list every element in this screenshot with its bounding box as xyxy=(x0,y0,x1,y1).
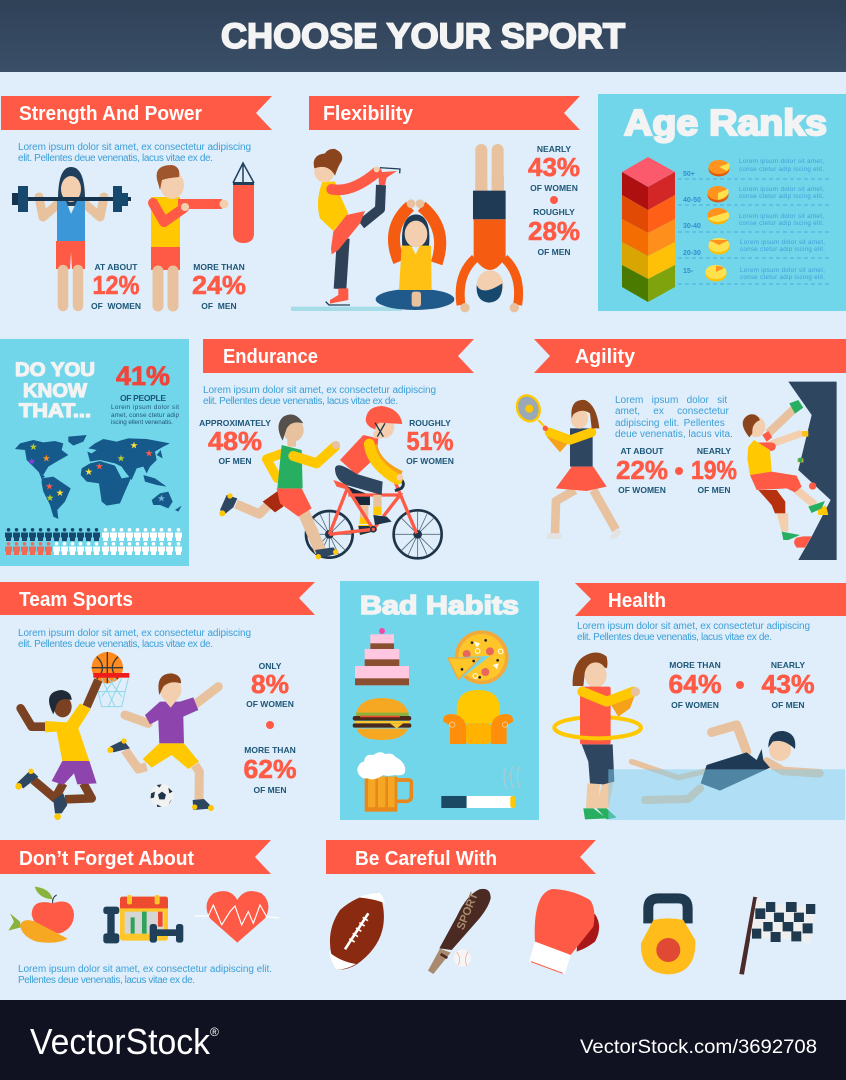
labels: age ranges: 20-30 xyxy=(683,250,701,257)
text: team sports description: elit. Pellentes deue venenatis, lacus vitae ex de. xyxy=(18,639,213,650)
panel: flexibility xyxy=(291,96,580,312)
chart: world map with stars: ★ xyxy=(84,467,93,477)
figure: basketball player jumping xyxy=(15,680,98,820)
heading: Do You Know That: THAT... xyxy=(19,400,91,422)
text: age rank descriptions: Lorem ipsum dolor sit amet, xyxy=(739,213,824,220)
text: team sports description: Lorem ipsum dolor sit amet, ex consectetur adipiscing xyxy=(18,628,251,639)
figure: woman lifting barbell xyxy=(12,167,131,306)
ribbon: Flexibility: Flexibility xyxy=(323,103,414,125)
stat: 62% of men xyxy=(244,745,296,795)
stat: 48% of men: OF MEN xyxy=(218,456,252,466)
pool water xyxy=(608,769,845,820)
panel: health xyxy=(554,583,846,820)
stat: 43% and 28%: 28% xyxy=(528,216,580,246)
figure: tennis player xyxy=(513,392,622,539)
panel: agility xyxy=(513,339,846,560)
stat: 43% of men xyxy=(762,660,814,710)
icon: armchair xyxy=(443,690,513,744)
stat: 24% of men: OF MEN xyxy=(201,301,237,311)
ribbon: Team Sports: Team Sports xyxy=(19,589,133,611)
stat: 22% of women xyxy=(616,446,668,495)
ice floor xyxy=(291,307,402,311)
text: endurance description: Lorem ipsum dolor sit amet, ex consectetur adipiscing xyxy=(203,385,436,396)
ribbon: Team Sports xyxy=(0,582,315,615)
figure: woman with hula hoop xyxy=(554,652,641,819)
chart: world map with stars xyxy=(15,435,182,519)
text: age rank descriptions: conse ctetur adip iscing elit. xyxy=(739,220,824,227)
figure: rock climber xyxy=(743,400,825,540)
stat: 43% and 28% xyxy=(528,144,580,257)
stat: 22% of women: 22% xyxy=(616,455,668,485)
panel: age ranks xyxy=(598,94,846,311)
text: don't forget description: Pellentes deue venenatis, lacus vitae ex de. xyxy=(18,975,195,986)
icon: pizza xyxy=(447,630,509,684)
header band with title: CHOOSE YOUR SPORT xyxy=(221,17,625,56)
stat: 24% of men: MORE THAN xyxy=(193,262,245,272)
ribbon: Agility xyxy=(534,339,846,373)
labels: age ranges: 40-50 xyxy=(683,197,701,204)
icon: american football xyxy=(329,892,385,970)
footer: watermark band xyxy=(0,1000,846,1080)
ribbon: Strength And Power: Strength And Power xyxy=(19,103,202,125)
figure: figure skater xyxy=(314,149,400,305)
stat: 41% of people: OF PEOPLE xyxy=(120,393,166,403)
icon: heart with pulse xyxy=(194,891,279,943)
stat: 24% of men xyxy=(192,262,246,311)
icon: calendar and dumbbells xyxy=(103,895,183,943)
heading: Do You Know That: KNOW xyxy=(23,380,88,402)
text: team sports description xyxy=(18,628,251,650)
text: agility description: Lorem ipsum dolor sit xyxy=(615,395,727,406)
figure: man punching xyxy=(151,165,228,306)
stat: 19% of men: NEARLY xyxy=(697,446,731,456)
ribbon: Be Careful With xyxy=(326,840,596,874)
stat: 43% of men: NEARLY xyxy=(771,660,805,670)
age rows xyxy=(678,179,830,284)
stat: 51% of women: 51% xyxy=(406,426,454,456)
text: age rank descriptions: Lorem ipsum dolor sit amet, xyxy=(739,158,824,165)
stat: 62% of men: OF MEN xyxy=(253,785,287,795)
figure: meditating woman xyxy=(376,199,454,310)
text: health description: elit. Pellentes deue venenatis, lacus vitae ex de. xyxy=(577,632,772,643)
icon: cigarette xyxy=(441,767,520,808)
figure: player kicking xyxy=(107,673,218,811)
ribbon: Be Careful With: Be Careful With xyxy=(355,848,497,870)
stat: 43% and 28%: OF MEN xyxy=(537,247,571,257)
stat: 41% of people xyxy=(111,361,179,426)
stat: 22% of women: OF WOMEN xyxy=(618,485,666,495)
stat: 41% of people: 41% xyxy=(116,361,170,391)
icon: checkered flag xyxy=(739,897,816,975)
stat: 64% of women: OF WOMEN xyxy=(671,700,719,710)
text: agility description xyxy=(615,395,733,440)
chart: stacked isometric column xyxy=(622,157,675,302)
text: agility description: deue venenatis, lacus vita. xyxy=(615,429,733,440)
labels: age ranges: 30-40 xyxy=(683,223,701,230)
stat: 62% of men: 62% xyxy=(244,754,296,784)
chart: world map with stars: ★ xyxy=(45,482,54,492)
stat: 48% of men: 48% xyxy=(208,426,262,456)
labels: age ranges xyxy=(683,171,701,275)
text: don't forget description: Lorem ipsum dolor sit amet, ex consectetur adipiscing elit. xyxy=(18,964,272,975)
text: age rank descriptions: Lorem ipsum dolor sit amet, xyxy=(740,267,825,274)
ribbon: Flexibility xyxy=(309,96,580,130)
chart: world map with stars: ★ xyxy=(42,454,51,464)
stat: 41% of people: iscing ellent venenatis. xyxy=(111,419,173,426)
stat: 64% of women: MORE THAN xyxy=(669,660,721,670)
stat: 48% of men xyxy=(199,418,271,466)
icon: kettlebell xyxy=(641,898,695,974)
stat: 43% and 28%: ROUGHLY xyxy=(533,207,575,217)
stat: 41% of people: Lorem ipsum dolor sit xyxy=(111,404,179,411)
icon: basketball hoop and ball xyxy=(92,652,129,707)
labels: age ranges: 50+ xyxy=(683,171,695,178)
text: strength description: Lorem ipsum dolor sit amet, ex consectetur adipiscing xyxy=(18,142,251,153)
panel: endurance xyxy=(199,339,474,559)
ribbon: Health: Health xyxy=(608,590,666,612)
stat: 12% of women: OF WOMEN xyxy=(91,301,141,311)
text: age rank descriptions: conse ctetur adip iscing elit. xyxy=(739,166,824,173)
stat: 19% of men: 19% xyxy=(691,455,737,485)
stat: 12% of women: 12% xyxy=(92,270,140,300)
icon: cake xyxy=(355,628,409,685)
stat: 12% of women: AT ABOUT xyxy=(95,262,138,272)
text: agility description: amet, ex consectetur xyxy=(615,406,729,417)
stat: 43% of men: OF MEN xyxy=(771,700,805,710)
heading: Age Ranks: Age Ranks xyxy=(624,102,827,143)
text: endurance description: elit. Pellentes deue venenatis, lacus vitae ex de. xyxy=(203,396,398,407)
stat: 24% of men: 24% xyxy=(192,270,246,300)
text: age rank descriptions: conse ctetur adip iscing elit. xyxy=(740,274,825,281)
icon: beer mug xyxy=(357,752,411,812)
text: health description xyxy=(577,621,810,643)
icon: baseball bat and ball: SPORT xyxy=(455,891,481,932)
stat: 8% of women: OF WOMEN xyxy=(246,699,294,709)
stat: 43% and 28%: NEARLY xyxy=(537,144,571,154)
chart: world map with stars: ★ xyxy=(145,449,153,459)
text: age rank descriptions: Lorem ipsum dolor sit amet, xyxy=(740,239,825,246)
icon: climbing wall and holds xyxy=(788,382,837,560)
text: agility description: adipiscing elit. Pellentes xyxy=(615,418,725,429)
ribbon: Endurance: Endurance xyxy=(223,346,318,368)
footer: watermark band: ® xyxy=(210,1025,219,1039)
stat: 43% and 28%: OF WOMEN xyxy=(530,183,578,193)
text: health description: Lorem ipsum dolor sit amet, ex consectetur adipiscing xyxy=(577,621,810,632)
header band with title xyxy=(0,0,846,72)
stat: 19% of men: OF MEN xyxy=(697,485,731,495)
text: age rank descriptions: Lorem ipsum dolor sit amet, xyxy=(739,186,824,193)
stat: 51% of women: OF WOMEN xyxy=(406,456,454,466)
chart: world map with stars: ★ xyxy=(130,441,138,451)
stat: 8% of women xyxy=(246,661,294,709)
footer: watermark band: VectorStock xyxy=(30,1021,211,1062)
chart: world map with stars: ★ xyxy=(29,442,38,452)
panel: team sports xyxy=(0,582,315,820)
panel: strength and power xyxy=(1,96,272,311)
panel: do you know that xyxy=(0,339,189,566)
figure: handstand person xyxy=(460,150,519,312)
chart: people pictogram xyxy=(5,528,182,555)
icon: soccer ball xyxy=(150,784,174,807)
ribbon: Strength And Power xyxy=(1,96,272,130)
ribbon: Agility: Agility xyxy=(575,346,636,368)
heading: Do You Know That xyxy=(15,359,95,422)
chart: world map with stars: ★ xyxy=(95,461,104,471)
stat: 51% of women xyxy=(406,418,454,466)
ribbon: Endurance xyxy=(203,339,474,373)
figure: swimmer xyxy=(632,725,819,800)
ribbon: Don't Forget About xyxy=(0,840,271,874)
text: age rank descriptions xyxy=(739,158,825,281)
stat: 8% of women: ONLY xyxy=(259,661,282,671)
chart: world map with stars: ★ xyxy=(157,494,166,504)
stat: 12% of women xyxy=(91,262,141,311)
chart: world map with stars: ★ xyxy=(27,457,36,467)
ribbon: Health xyxy=(575,583,846,616)
icons: pie charts xyxy=(706,160,730,282)
icon: punching bag xyxy=(233,163,254,243)
stat: 43% and 28%: 43% xyxy=(528,152,580,182)
stat: 64% of women: 64% xyxy=(668,669,722,699)
chart: world map with stars: ★ xyxy=(56,488,64,498)
stat: 43% of men: 43% xyxy=(762,669,814,699)
panel: don't forget about xyxy=(0,840,279,986)
text: age rank descriptions: conse ctetur adip iscing elit. xyxy=(740,246,825,253)
icon: apple and carrot xyxy=(8,887,74,943)
text: strength description xyxy=(18,142,251,164)
chart: world map with stars: ★ xyxy=(46,493,54,503)
text: endurance description xyxy=(203,385,436,407)
text: age rank descriptions: conse ctetur adip iscing elit. xyxy=(739,193,824,200)
stat: 64% of women xyxy=(668,660,722,710)
text: strength description: elit. Pellentes deue venenatis, lacus vitae ex de. xyxy=(18,153,213,164)
footer: watermark band: VectorStock.com/3692708 xyxy=(580,1037,817,1058)
stat: 48% of men: APPROXIMATELY xyxy=(199,418,271,428)
chart: world map with stars: ★ xyxy=(117,454,125,464)
stat: 22% of women: AT ABOUT xyxy=(621,446,664,456)
stat: 62% of men: MORE THAN xyxy=(244,745,296,755)
heading: Do You Know That: DO YOU xyxy=(15,359,95,381)
figure: cyclist on bicycle xyxy=(306,406,442,558)
stat: 8% of women: 8% xyxy=(251,669,289,699)
ribbon: Don't Forget About: Don’t Forget About xyxy=(19,848,194,870)
icon: burger xyxy=(353,698,411,740)
labels: age ranges: 15- xyxy=(683,268,694,275)
text: don't forget description xyxy=(18,964,272,986)
stat: 51% of women: ROUGHLY xyxy=(409,418,451,428)
panel: be careful with xyxy=(326,840,816,975)
panel: bad habits xyxy=(340,581,539,820)
stat: 41% of people: amet, conse ctetur adip xyxy=(111,412,179,419)
stat: 19% of men xyxy=(691,446,737,495)
icon: boxing glove xyxy=(529,889,599,974)
heading: Bad Habits: Bad Habits xyxy=(360,590,519,620)
figure: runner xyxy=(219,414,340,559)
icon: baseball bat and ball xyxy=(428,889,491,974)
